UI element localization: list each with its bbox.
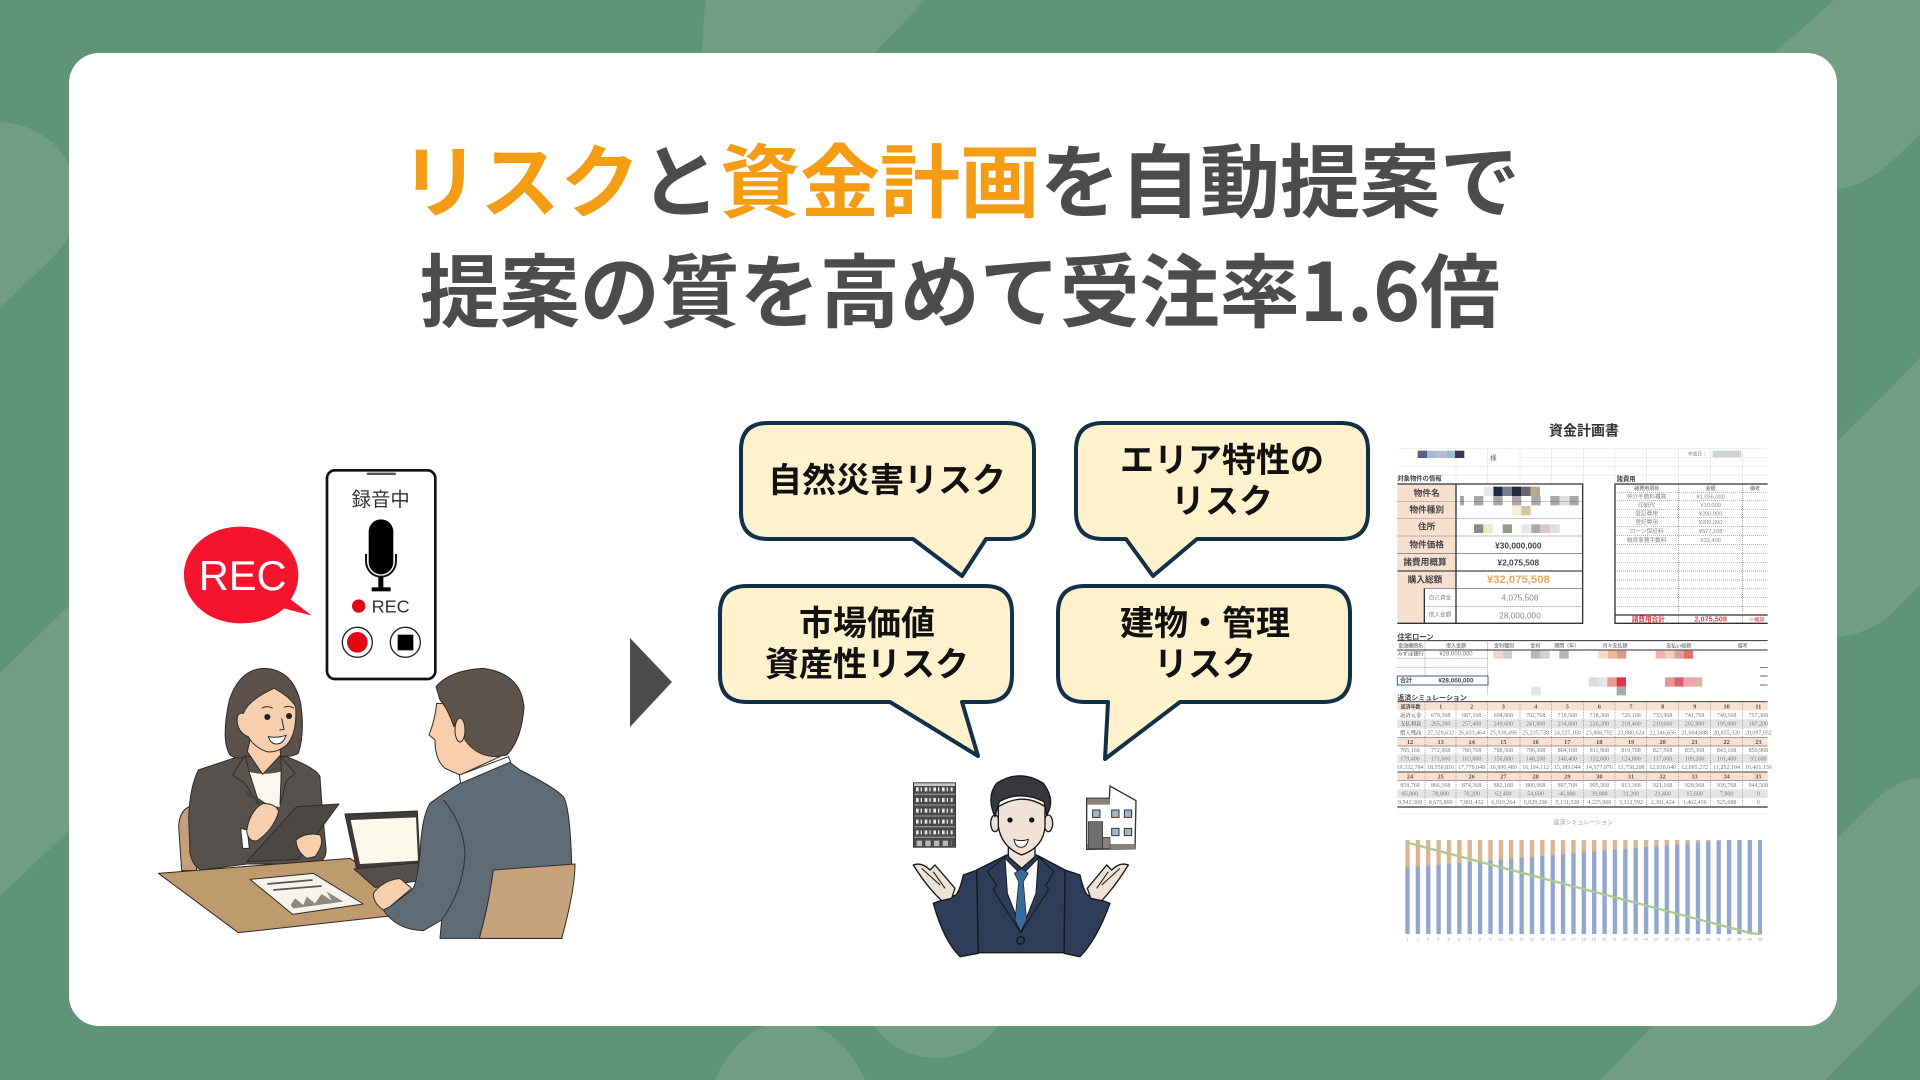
- speech bubble: building risk: [1058, 586, 1350, 759]
- table: housing loan: 金利: [1530, 642, 1540, 649]
- speech bubble: natural disaster risk: [741, 423, 1034, 576]
- table: repayment simulation: 28: [1533, 773, 1539, 780]
- table: repayment simulation: 202,800: [1685, 722, 1704, 728]
- table: repayment simulation: 525,688: [1717, 800, 1736, 806]
- table: miscellaneous expenses: ¥32,400: [1700, 538, 1721, 544]
- chart: repayment simulation stacked bars: 11: [1509, 937, 1514, 942]
- table: repayment simulation: 17,779,048: [1458, 765, 1485, 771]
- table: repayment simulation: 23,400: [1654, 791, 1671, 797]
- table: repayment simulation: 195,000: [1717, 722, 1736, 728]
- table: repayment simulation: 25,235,728: [1522, 731, 1549, 737]
- table: miscellaneous expenses: ローン保証料: [1630, 527, 1664, 535]
- table: repayment simulation: 866,568: [1431, 783, 1450, 789]
- table: repayment simulation: 22,346,656: [1649, 731, 1676, 737]
- table: repayment simulation: 148,200: [1526, 756, 1545, 762]
- speech bubble: market value risk: 市場価値: [799, 605, 935, 643]
- table: repayment simulation: 827,568: [1653, 748, 1672, 754]
- table: repayment simulation: 109,200: [1685, 756, 1704, 762]
- table: repayment simulation: 0: [1757, 800, 1760, 806]
- table: repayment simulation: 741,768: [1685, 713, 1704, 719]
- chart: repayment simulation stacked bars: 21: [1612, 937, 1618, 942]
- table: repayment simulation: 726,168: [1621, 713, 1641, 719]
- icon: smartphone recording screen: 録音中: [352, 484, 410, 512]
- table: repayment simulation: 23: [1755, 739, 1761, 746]
- header grid and masked name: 作成日：: [1688, 450, 1707, 457]
- table: repayment simulation: 借入残高: [1400, 729, 1422, 737]
- table: repayment simulation: 132,600: [1590, 756, 1609, 762]
- table: property information: 諸費用概算: [1403, 556, 1447, 567]
- table: repayment simulation: 14: [1469, 739, 1476, 746]
- table: repayment simulation: 702,768: [1526, 713, 1545, 719]
- financial plan document, upper part: [1397, 421, 1768, 623]
- table: repayment simulation: 16: [1533, 739, 1539, 746]
- table: repayment simulation: 679,368: [1431, 713, 1450, 719]
- table: repayment simulation: 20,097,952: [1745, 731, 1772, 737]
- table: repayment simulation: 265,200: [1431, 722, 1450, 728]
- table: housing loan: 借入金額: [1446, 642, 1466, 649]
- table: repayment simulation: 0: [1757, 791, 1760, 797]
- table: repayment simulation: 171,600: [1431, 756, 1450, 762]
- chart: repayment simulation stacked bars: 17: [1571, 937, 1576, 942]
- table: repayment simulation: 29: [1564, 773, 1570, 780]
- table: repayment simulation: 1: [1439, 703, 1442, 710]
- chart: repayment simulation stacked bars: 16: [1561, 937, 1566, 942]
- table: housing loan: [1397, 632, 1768, 695]
- table: repayment simulation: 70,200: [1463, 791, 1480, 797]
- icon: red REC speech bubble: [184, 527, 312, 623]
- speech bubble: building risk: 建物・管理: [1120, 605, 1290, 643]
- table: repayment simulation: 19,332,784: [1397, 765, 1423, 771]
- table: repayment simulation: 16,194,112: [1522, 765, 1549, 771]
- chart: repayment simulation stacked bars: 1: [1406, 937, 1409, 942]
- table: repayment simulation: 6: [1598, 703, 1601, 710]
- table: property information: 物件名: [1414, 487, 1440, 498]
- table: repayment simulation: 749,568: [1717, 713, 1736, 719]
- table: property information: 住所: [1418, 520, 1436, 531]
- table: miscellaneous expenses: 諸費用項目: [1634, 485, 1659, 492]
- title: 提案の質を高めて受注率1.6倍: [420, 229, 1500, 345]
- table: repayment simulation: 226,200: [1590, 722, 1609, 728]
- table: repayment simulation: 15,389,944: [1554, 765, 1581, 771]
- table: property information: 28,000,000: [1499, 610, 1541, 620]
- chart: repayment simulation stacked bars: 9: [1489, 937, 1492, 942]
- chart: repayment simulation stacked bars: 35: [1758, 937, 1763, 942]
- table: repayment simulation: 32: [1659, 773, 1666, 780]
- table: repayment simulation: 921,168: [1653, 783, 1672, 789]
- table: repayment simulation: 850,968: [1749, 748, 1768, 754]
- chart: repayment simulation stacked bars: 30: [1706, 937, 1711, 942]
- table: repayment simulation: 874,368: [1462, 783, 1481, 789]
- table: repayment simulation: 16,990,480: [1490, 765, 1517, 771]
- table: repayment simulation: 163,800: [1462, 756, 1481, 762]
- table: repayment simulation: 26,633,464: [1458, 731, 1485, 737]
- chart: repayment simulation stacked bars: 33: [1737, 937, 1742, 942]
- chart: repayment simulation stacked bars: 6: [1458, 937, 1461, 942]
- table: repayment simulation: 14,577,976: [1586, 765, 1613, 771]
- chart: repayment simulation stacked bars: 14: [1540, 937, 1545, 942]
- chart: repayment simulation stacked bars: 12: [1519, 937, 1524, 942]
- icon: smartphone recording screen: [327, 470, 435, 679]
- table: repayment simulation: 12,930,640: [1649, 765, 1676, 771]
- table: miscellaneous expenses: ※概算: [1749, 615, 1765, 623]
- table: repayment simulation: 757,368: [1749, 713, 1768, 719]
- table: repayment simulation: 返済元金: [1400, 711, 1422, 719]
- chart: repayment simulation stacked bars: 34: [1747, 937, 1753, 942]
- table: repayment simulation: 101,400: [1717, 756, 1736, 762]
- table: repayment simulation: 30: [1596, 773, 1602, 780]
- table: housing loan: 合計: [1400, 677, 1412, 685]
- table: repayment simulation: 913,368: [1621, 783, 1641, 789]
- figure: meeting table with document: [158, 858, 430, 933]
- table: repayment simulation: 944,568: [1749, 783, 1768, 789]
- table: repayment simulation: 15,600: [1686, 791, 1703, 797]
- figure: advisor in navy suit: [913, 776, 1128, 957]
- table: repayment simulation: 796,368: [1526, 748, 1545, 754]
- table: repayment simulation: 687,168: [1462, 713, 1481, 719]
- table: housing loan: 住宅ローン: [1397, 632, 1434, 641]
- table: repayment simulation: 21: [1691, 739, 1698, 746]
- table: repayment simulation: 93,600: [1750, 756, 1767, 762]
- figure: customer seen from behind: [373, 668, 575, 938]
- table: repayment simulation: 140,400: [1558, 756, 1577, 762]
- table: miscellaneous expenses: 登記費用: [1635, 509, 1658, 517]
- table: repayment simulation: 22: [1723, 739, 1730, 746]
- table: repayment simulation: 156,000: [1494, 756, 1513, 762]
- table: repayment simulation: 882,168: [1494, 783, 1513, 789]
- table: repayment simulation: 5,131,528: [1555, 800, 1579, 806]
- table: repayment simulation: 819,768: [1621, 748, 1641, 754]
- table: miscellaneous expenses: 金額: [1706, 485, 1716, 492]
- table: repayment simulation: 20,855,320: [1713, 731, 1740, 737]
- table: repayment simulation: 811,968: [1590, 748, 1609, 754]
- chart: repayment simulation stacked bars: 13: [1529, 937, 1535, 942]
- table: repayment simulation: 928,968: [1685, 783, 1704, 789]
- chart: repayment simulation stacked bars: 5: [1448, 937, 1451, 942]
- table: repayment simulation: 35: [1755, 773, 1761, 780]
- speech bubble: building risk: リスク: [1154, 646, 1256, 684]
- table: property information: 対象物件の情報: [1397, 474, 1442, 483]
- table: repayment simulation: 13: [1438, 739, 1444, 746]
- table: repayment simulation: [1397, 693, 1772, 807]
- table: repayment simulation: 23,080,624: [1618, 731, 1644, 737]
- table: repayment simulation: 20: [1659, 739, 1666, 746]
- table: repayment simulation: 234,000: [1558, 722, 1577, 728]
- chart: repayment simulation stacked bars: 29: [1695, 937, 1701, 942]
- chart: repayment simulation stacked bars: 31: [1716, 937, 1722, 942]
- table: repayment simulation: 835,368: [1685, 748, 1704, 754]
- figure: saleswoman taking notes: [179, 668, 339, 871]
- table: repayment simulation: 12,095,272: [1681, 765, 1708, 771]
- title: リスクと資金計画を自動提案で: [400, 119, 1520, 235]
- title: [400, 119, 1520, 345]
- chart: repayment simulation stacked bars: 28: [1685, 937, 1690, 942]
- table: miscellaneous expenses: ¥200,000: [1699, 511, 1722, 517]
- table: housing loan: 支払い総額: [1666, 642, 1691, 649]
- table: repayment simulation: 25: [1438, 773, 1444, 780]
- chart: repayment simulation stacked bars: 27: [1675, 937, 1680, 942]
- table: repayment simulation: 18,559,816: [1427, 765, 1454, 771]
- table: repayment simulation: 10: [1723, 703, 1730, 710]
- table: miscellaneous expenses: 登記費用: [1635, 518, 1658, 526]
- table: repayment simulation: 718,368: [1590, 713, 1609, 719]
- table: repayment simulation: 33: [1691, 773, 1698, 780]
- chart: repayment simulation stacked bars: 19: [1592, 937, 1597, 942]
- illustration: advisor with buildings: [913, 776, 1136, 957]
- table: miscellaneous expenses: 諸費用合計: [1632, 614, 1665, 623]
- table: repayment simulation: 6,029,296: [1524, 800, 1548, 806]
- chart: repayment simulation stacked bars: 2: [1417, 937, 1420, 942]
- table: repayment simulation: 2,391,424: [1651, 800, 1675, 806]
- table: repayment simulation: 返済年数: [1401, 703, 1421, 710]
- table: property information: ¥32,075,508: [1487, 574, 1550, 586]
- chart: repayment simulation stacked bars: 22: [1623, 937, 1628, 942]
- chart: repayment simulation stacked bars: 26: [1664, 937, 1670, 942]
- chart: repayment simulation stacked bars: 24: [1644, 937, 1649, 942]
- chart: repayment simulation stacked bars: 7: [1469, 937, 1472, 942]
- table: repayment simulation: 7: [1629, 703, 1633, 710]
- table: repayment simulation: 117,000: [1653, 756, 1672, 762]
- table: miscellaneous expenses: ¥577,108: [1699, 529, 1722, 535]
- chart: repayment simulation stacked bars: 8: [1479, 937, 1482, 942]
- speech bubble: market value risk: [720, 586, 1012, 756]
- table: repayment simulation: 12: [1407, 739, 1413, 746]
- table: repayment simulation: 5: [1566, 703, 1569, 710]
- table: repayment simulation: 3: [1502, 703, 1505, 710]
- table: repayment simulation: 241,800: [1526, 722, 1545, 728]
- table: repayment simulation: 39,000: [1591, 791, 1608, 797]
- table: repayment simulation: 936,768: [1717, 783, 1736, 789]
- table: repayment simulation: 24,525,160: [1554, 731, 1581, 737]
- table: property information: 物件種別: [1409, 504, 1444, 515]
- table: repayment simulation: 11: [1755, 703, 1761, 710]
- table: repayment simulation: 843,168: [1717, 748, 1736, 754]
- table: repayment simulation: 19: [1628, 739, 1634, 746]
- table: repayment simulation: 772,968: [1431, 748, 1450, 754]
- speech bubble: area risk: リスク: [1171, 483, 1273, 521]
- table: property information: 購入総額: [1408, 574, 1443, 585]
- table: repayment simulation: 905,568: [1590, 783, 1609, 789]
- table: repayment simulation: 788,568: [1494, 748, 1513, 754]
- table: housing loan: 金利種別: [1494, 642, 1514, 649]
- table: repayment simulation: 4: [1534, 703, 1538, 710]
- chart: repayment simulation stacked bars: 3: [1427, 937, 1430, 942]
- table: repayment simulation: 10,401,136: [1745, 765, 1772, 771]
- table: repayment simulation: 889,968: [1526, 783, 1545, 789]
- table: repayment simulation: 85,800: [1402, 791, 1418, 797]
- chart: repayment simulation stacked bars: 25: [1654, 937, 1659, 942]
- table: housing loan: ¥28,000,000: [1438, 678, 1474, 685]
- table: property information: ¥2,075,508: [1497, 558, 1540, 568]
- table: repayment simulation: 46,800: [1559, 791, 1576, 797]
- table: property information: 借入金額: [1429, 611, 1452, 619]
- table: housing loan: 金融機関名: [1398, 642, 1423, 649]
- table: repayment simulation: 733,968: [1653, 713, 1672, 719]
- header grid and masked name: 様: [1490, 453, 1497, 462]
- table: repayment simulation: 257,400: [1462, 722, 1481, 728]
- table: housing loan: 備考: [1738, 642, 1748, 649]
- table: miscellaneous expenses: 融資事務手数料: [1627, 536, 1667, 544]
- table: repayment simulation: 8,675,800: [1429, 800, 1453, 806]
- table: repayment simulation: 78,000: [1432, 791, 1449, 797]
- table: repayment simulation: 3,312,592: [1619, 800, 1643, 806]
- chart: repayment simulation stacked bars: 20: [1602, 937, 1607, 942]
- table: repayment simulation: 1,462,456: [1683, 800, 1707, 806]
- table: repayment simulation: 25,938,496: [1490, 731, 1517, 737]
- table: repayment simulation: 179,400: [1400, 756, 1420, 762]
- table: repayment simulation: 7,801,432: [1460, 800, 1484, 806]
- table: repayment simulation: 9,542,368: [1398, 800, 1422, 806]
- table: repayment simulation: 2: [1470, 703, 1473, 710]
- table: repayment simulation: 18: [1596, 739, 1602, 746]
- icon: house: [1087, 786, 1136, 849]
- table: property information: 物件価格: [1409, 538, 1444, 549]
- table: repayment simulation: 765,168: [1400, 748, 1420, 754]
- chart: repayment simulation stacked bars: 18: [1581, 937, 1587, 942]
- table: repayment simulation: 4,225,960: [1587, 800, 1611, 806]
- table: repayment simulation: 27: [1500, 773, 1507, 780]
- table: miscellaneous expenses: [1615, 474, 1768, 623]
- table: repayment simulation: 7,800: [1720, 791, 1733, 797]
- chart: repayment simulation stacked bars: 返済シミュレーション: [1554, 819, 1613, 827]
- table: repayment simulation: 218,400: [1621, 722, 1641, 728]
- table: miscellaneous expenses: ¥200,000: [1699, 520, 1722, 526]
- table: repayment simulation: 858,768: [1400, 783, 1420, 789]
- speech bubble: area risk: エリア特性の: [1120, 442, 1324, 480]
- table: repayment simulation: 780,768: [1462, 748, 1481, 754]
- table: repayment simulation: 897,768: [1558, 783, 1577, 789]
- table: repayment simulation: 124,800: [1621, 756, 1641, 762]
- table: repayment simulation: 249,600: [1494, 722, 1513, 728]
- table: repayment simulation: 34: [1723, 773, 1731, 780]
- table: miscellaneous expenses: 仲介手数料概算: [1627, 492, 1667, 500]
- table: miscellaneous expenses: ¥1,056,000: [1697, 494, 1725, 500]
- table: miscellaneous expenses: 印紙代: [1638, 501, 1655, 509]
- table: property information: 自己資金: [1429, 593, 1452, 601]
- table: property information: [1397, 474, 1583, 623]
- table: repayment simulation: 6,919,264: [1491, 800, 1515, 806]
- table: repayment simulation: 26: [1469, 773, 1475, 780]
- table: repayment simulation: 13,758,208: [1618, 765, 1644, 771]
- table: repayment simulation: 24: [1407, 773, 1414, 780]
- table: miscellaneous expenses: 2,075,508: [1694, 614, 1727, 623]
- illustration: recorded meeting: [158, 470, 575, 938]
- speech bubble: market value risk: 資産性リスク: [765, 646, 969, 684]
- icon: apartment building: [913, 783, 956, 847]
- icon: red REC speech bubble: REC: [199, 552, 287, 599]
- table: repayment simulation: 694,968: [1494, 713, 1513, 719]
- table: housing loan: 期間（年）: [1554, 642, 1579, 649]
- chart: repayment simulation stacked bars: 32: [1727, 937, 1732, 942]
- table: housing loan: 月々支払額: [1603, 642, 1627, 649]
- table: repayment simulation: 804,168: [1558, 748, 1577, 754]
- icon: laptop: [345, 811, 423, 887]
- chart: repayment simulation stacked bars: 23: [1633, 937, 1639, 942]
- table: housing loan: みずほ銀行: [1397, 649, 1425, 657]
- document heading: 資金計画書: [1549, 421, 1619, 441]
- table: repayment simulation: 27,320,632: [1427, 731, 1454, 737]
- table: repayment simulation: 17: [1564, 739, 1571, 746]
- table: repayment simulation: 187,200: [1749, 722, 1768, 728]
- table: property information: ¥30,000,000: [1495, 540, 1542, 550]
- table: repayment simulation: 31: [1628, 773, 1634, 780]
- table: miscellaneous expenses: 備考: [1750, 485, 1760, 492]
- table: repayment simulation: 62,400: [1495, 791, 1512, 797]
- icon: smartphone recording screen: REC: [372, 597, 410, 617]
- table: miscellaneous expenses: 諸費用: [1617, 474, 1636, 483]
- table: repayment simulation: 返済シミュレーション: [1397, 693, 1467, 702]
- chart: repayment simulation stacked bars: 4: [1437, 937, 1440, 942]
- chart: repayment simulation stacked bars: 10: [1498, 937, 1504, 942]
- arrow: [630, 638, 672, 727]
- table: repayment simulation: 710,568: [1558, 713, 1577, 719]
- table: repayment simulation: 8: [1661, 703, 1664, 710]
- table: repayment simulation: 54,600: [1527, 791, 1544, 797]
- table: repayment simulation: 210,600: [1653, 722, 1672, 728]
- table: housing loan: ¥28,000,000: [1439, 652, 1473, 658]
- table: repayment simulation: 15: [1500, 739, 1506, 746]
- table: repayment simulation: 支払利息: [1400, 720, 1422, 728]
- table: miscellaneous expenses: ¥10,000: [1700, 503, 1721, 509]
- table: repayment simulation: 23,806,792: [1586, 731, 1613, 737]
- chart: repayment simulation stacked bars: 15: [1550, 937, 1556, 942]
- speech bubble: area risk: [1076, 423, 1368, 576]
- header grid and masked name: [1397, 448, 1768, 484]
- chart: repayment simulation stacked bars: [1397, 814, 1768, 942]
- speech bubble: natural disaster risk: 自然災害リスク: [768, 462, 1006, 500]
- table: repayment simulation: 11,252,104: [1713, 765, 1740, 771]
- table: property information: 4,075,508: [1501, 593, 1539, 603]
- financial plan document, lower part: [1397, 632, 1772, 942]
- table: repayment simulation: 31,200: [1623, 791, 1639, 797]
- table: repayment simulation: 9: [1693, 703, 1696, 710]
- table: repayment simulation: 21,604,888: [1681, 731, 1708, 737]
